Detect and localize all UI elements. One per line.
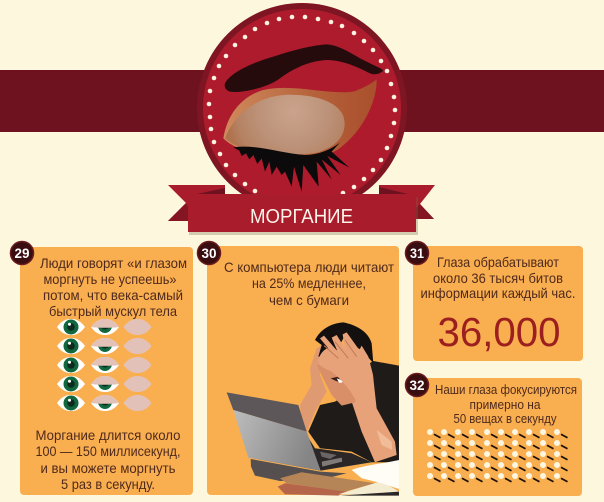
text: fact 31: информации каждый час. [420,285,576,301]
icon grid: 50 magnifiers [427,429,568,482]
badge 30: 30 [202,245,217,261]
emblem: eye circle [197,3,407,213]
badge 29: 29 [14,245,30,261]
hair [315,322,373,363]
panel: fact 32 [406,374,582,496]
big number: 36,000 [438,309,560,355]
text: fact 32 [435,382,577,426]
dotted ring [207,15,397,195]
panel: fact 30 [198,242,399,496]
text: fact 32: Наши глаза фокусируются [435,382,577,397]
text: fact 29 intro [40,255,187,319]
text: fact 29 detail: 100 — 150 миллисекунд, [36,443,180,459]
text: fact 30: С компьютера люди читают [224,259,395,275]
text: fact 32: 50 вещах в секунду [454,411,557,426]
badge 31: 31 [410,245,424,261]
lashes [233,143,349,192]
text: fact 29 intro: моргнуть не успеешь» [44,271,177,287]
papers [352,460,399,489]
near forearm [348,368,397,462]
face [317,365,359,406]
panel: fact 31 [406,242,583,361]
text: fact 29 detail: 5 раз в секунду. [61,476,155,492]
text: fact 30: на 25% медленнее, [252,275,366,291]
closed eye [223,44,383,192]
eyebrow [225,44,383,92]
text: fact 29 detail: Моргание длится около [36,427,181,443]
text: fact 29 intro: Люди говорят «и глазом [40,255,187,271]
text: fact 29 intro: потом, что века-самый [43,287,183,303]
badge 32: 32 [410,377,425,393]
badge 29 [10,242,34,264]
near hand [318,332,377,415]
icon grid: blinking eyes [57,319,152,411]
header band [0,70,604,132]
laptop [250,435,372,471]
text: fact 29 detail [36,427,181,492]
shirt [308,361,399,462]
text: fact 31: Глаза обрабатывают [437,254,560,270]
badge 31 [406,242,428,264]
text: fact 30 [224,259,395,308]
text: fact 29 intro: быстрый мускул тела [49,303,177,319]
ribbon tails [168,185,225,221]
far arm [300,345,327,432]
panel: fact 29 [10,242,193,495]
title: МОРГАНИЕ [250,206,353,228]
badge 30 [198,242,220,264]
text: fact 30: чем с бумаги [269,292,349,308]
badge 32 [406,374,428,396]
text: fact 32: примерно на [470,397,541,412]
illustration: frustrated man at laptop [227,322,399,496]
text: fact 29 detail: и вы можете моргнуть [40,460,176,476]
text: fact 31: около 36 тысяч битов [433,270,563,286]
books [278,483,348,496]
text: fact 31 [420,254,576,301]
ribbon with title [168,185,435,235]
